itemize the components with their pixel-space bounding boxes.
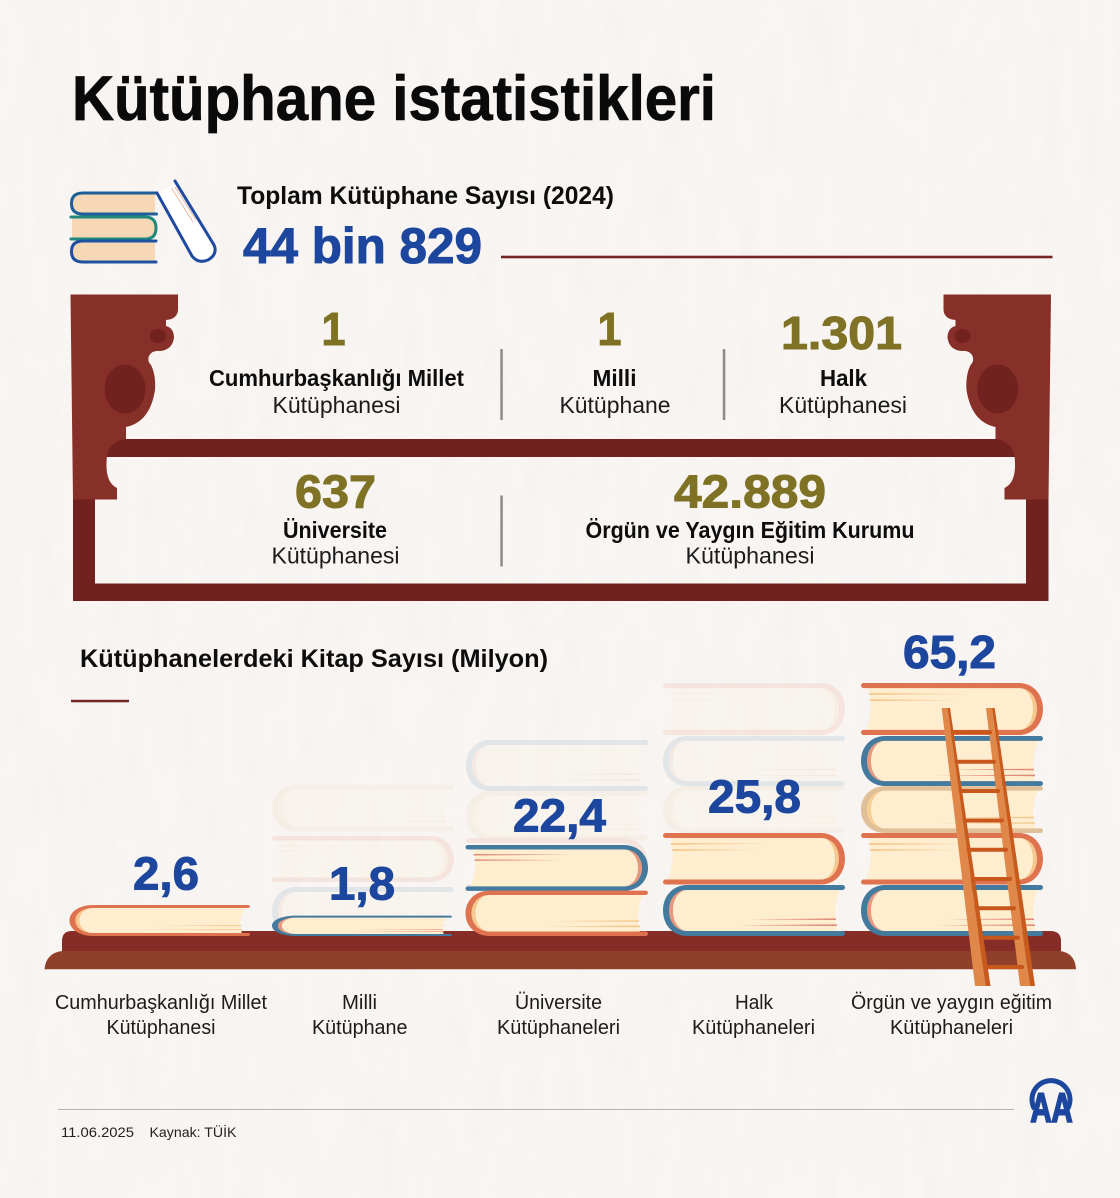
divider: row one left <box>500 349 503 420</box>
stat: education institution libraries <box>586 466 914 568</box>
category label: national: Milli <box>342 991 377 1014</box>
bar: presidential library books <box>69 848 250 936</box>
stat: university libraries <box>272 466 400 568</box>
stat: education institution libraries: Kütüphanesi <box>686 542 814 568</box>
stat: presidential library: Kütüphanesi <box>272 392 400 418</box>
value: 25,8: 25,8 <box>708 771 801 823</box>
ghost books: maximum-height placeholders <box>272 683 845 936</box>
icon: ladder <box>942 708 1035 986</box>
category label: national: Kütüphane <box>312 1016 408 1039</box>
stat: public libraries: Halk <box>820 365 867 391</box>
divider: total line <box>501 256 1052 258</box>
category label: education institutions <box>851 991 1052 1039</box>
divider: row two <box>500 496 503 566</box>
stat: public libraries <box>779 307 907 418</box>
category label: university: Üniversite <box>515 991 602 1014</box>
category label: public: Halk <box>735 991 774 1014</box>
divider: row one right <box>723 349 725 420</box>
title: Kütüphane istatistikleri <box>72 64 716 134</box>
category label: education institutions: Kütüphaneleri <box>890 1016 1013 1039</box>
category label: education institutions: Örgün ve yaygın eğitim <box>851 991 1052 1014</box>
category label: national <box>312 991 408 1039</box>
divider: heading rule <box>71 700 129 702</box>
stat: education institution libraries: 42.889 <box>674 466 826 518</box>
stat: national library: 1 <box>598 303 622 355</box>
category label: public <box>692 991 815 1039</box>
total library number: 44 bin 829 <box>243 218 482 274</box>
stat: presidential library: Cumhurbaşkanlığı Millet <box>209 365 464 391</box>
bar: public library books <box>663 771 845 936</box>
category label: university <box>497 991 620 1039</box>
panel: bookcase frame <box>70 294 1051 601</box>
bar: university library books <box>465 790 648 936</box>
stat: university libraries: Üniversite <box>283 517 387 543</box>
stat: education institution libraries: Örgün ve Yaygın Eğitim Kurumu <box>586 517 914 543</box>
shelf <box>44 931 1076 969</box>
stat: presidential library <box>209 303 464 418</box>
stat: public libraries: 1.301 <box>781 307 902 359</box>
stat: university libraries: 637 <box>295 466 376 518</box>
icon: AA logo <box>1030 1081 1072 1130</box>
stat: national library <box>560 303 670 418</box>
bar: education institution library books <box>861 626 1043 936</box>
total library heading: Toplam Kütüphane Sayısı (2024) <box>237 182 614 210</box>
value: 2,6: 2,6 <box>133 848 199 900</box>
value: 65,2: 65,2 <box>903 626 996 678</box>
category label: presidential <box>55 991 267 1039</box>
bar: national library books <box>272 858 452 936</box>
footer source: Kaynak: TÜİK <box>150 1123 237 1140</box>
divider: footer rule <box>58 1109 1014 1110</box>
stat: national library: Milli <box>592 365 636 391</box>
category label: presidential: Kütüphanesi <box>106 1016 216 1039</box>
icon: AA logo: AA <box>1030 1084 1072 1130</box>
book count heading: Kütüphanelerdeki Kitap Sayısı (Milyon) <box>80 645 548 673</box>
category label: public: Kütüphaneleri <box>692 1016 815 1039</box>
category label: presidential: Cumhurbaşkanlığı Millet <box>55 991 267 1014</box>
stat: public libraries: Kütüphanesi <box>779 392 907 418</box>
category label: university: Kütüphaneleri <box>497 1016 620 1039</box>
stat: presidential library: 1 <box>322 303 346 355</box>
value: 22,4: 22,4 <box>513 790 606 842</box>
stat: national library: Kütüphane <box>560 392 670 418</box>
footer date: 11.06.2025 <box>61 1124 134 1140</box>
stat: university libraries: Kütüphanesi <box>272 542 400 568</box>
icon: stack of books <box>71 181 215 262</box>
value: 1,8: 1,8 <box>329 858 395 910</box>
